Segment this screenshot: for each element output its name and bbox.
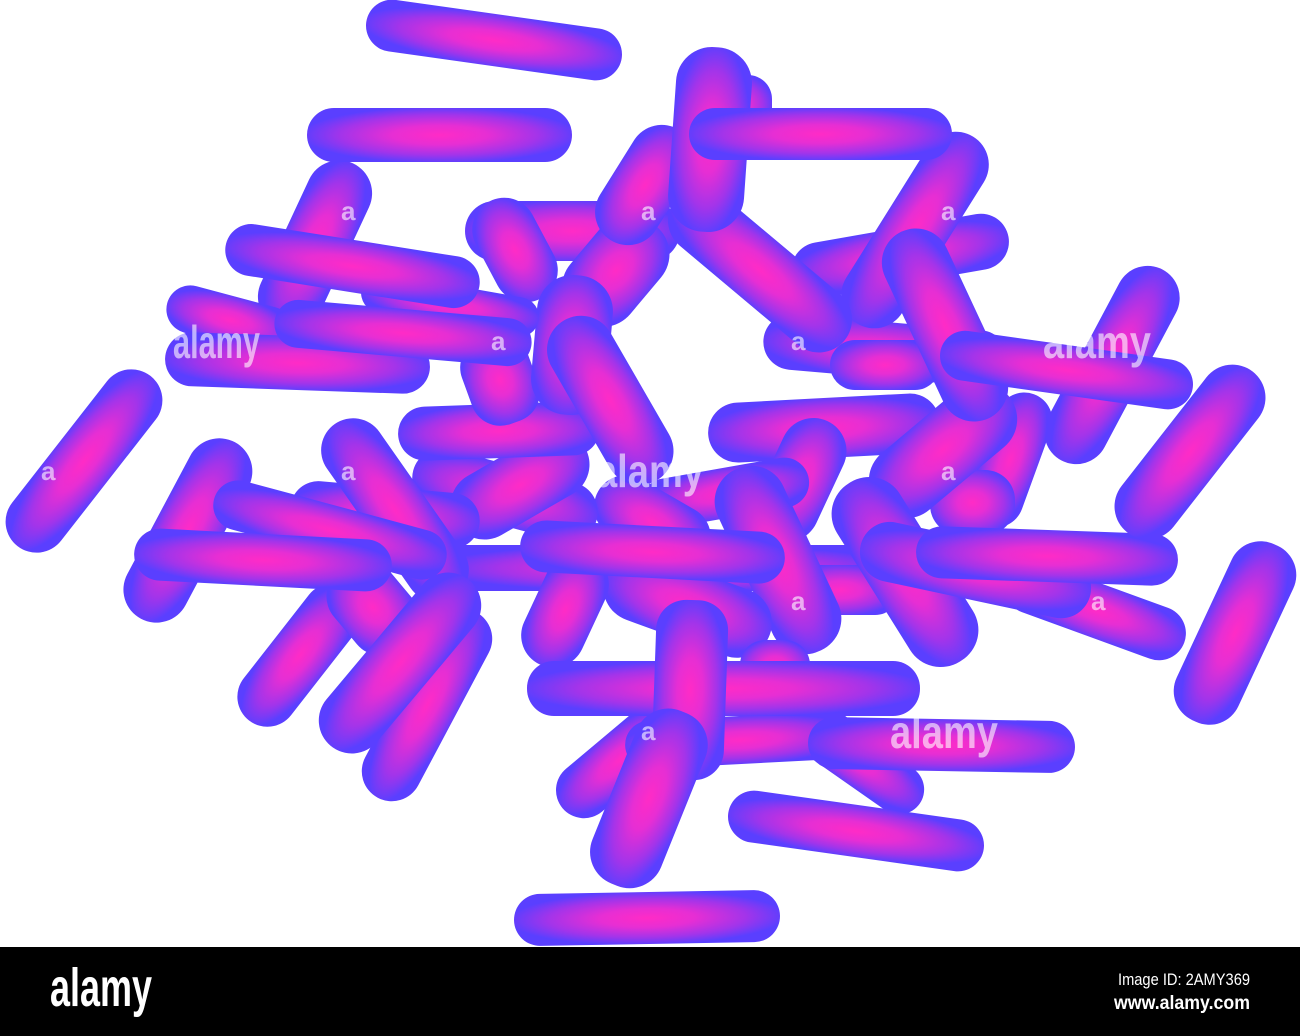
rod: centre steep <box>703 454 853 666</box>
rod: upper isolated <box>307 108 572 162</box>
rod: right steep <box>818 463 992 681</box>
rod: upper angled <box>583 112 707 258</box>
rod: lower horizontal back <box>624 710 856 770</box>
rod: left lower diagonal <box>208 475 452 585</box>
rod: left horizontal middle <box>397 401 601 462</box>
rod: right horizontal <box>937 328 1196 413</box>
rod: bottom left steep <box>305 559 495 767</box>
footer bar <box>0 947 1300 1036</box>
rod: centre right back <box>761 311 1010 389</box>
rod: centre back <box>582 463 723 581</box>
rod: left centre angled <box>438 418 602 552</box>
rod: upper centre short <box>461 186 569 314</box>
watermark: alamy left: alamy <box>173 316 260 368</box>
watermark: alamy right: alamy <box>1043 316 1151 368</box>
rod: left horizontal <box>133 527 393 593</box>
watermark: letter marks: a <box>791 326 806 356</box>
watermark: letter marks: a <box>1091 586 1106 616</box>
rod: centre lower short <box>511 542 619 678</box>
rod: bottom left steep back <box>351 598 503 812</box>
rod: lower left steep <box>225 571 375 739</box>
rod: right bottom isolated <box>1163 531 1300 735</box>
rod: lower left diagonal <box>545 690 695 830</box>
rod: middle long back <box>440 545 890 591</box>
watermark: letter marks: a <box>791 586 806 616</box>
rod: upper right steep <box>871 217 1019 433</box>
rod: left lower horizontal <box>164 331 431 395</box>
rod: lower right horizontal <box>808 717 1075 773</box>
rod: lower steep <box>580 698 718 898</box>
rod: back top right <box>700 75 772 135</box>
rod: centre diagonal <box>535 303 686 498</box>
rod: centre horizontal top <box>519 519 786 585</box>
watermark: letter marks: a <box>491 326 506 356</box>
rod: lower right isolated <box>725 787 987 875</box>
rod: steep back <box>960 385 1060 535</box>
rod: lower long horizontal <box>527 661 920 716</box>
footer logo: alamy: alamy <box>50 958 152 1018</box>
rod: back upper blob <box>547 200 684 342</box>
rod: left steep <box>112 427 264 634</box>
rod: lower left back <box>313 546 433 669</box>
rod: left upper steep <box>247 149 383 341</box>
rod: left far back <box>161 280 299 360</box>
rod: centre short <box>743 407 857 553</box>
rod: bottom isolated <box>514 890 780 946</box>
footer image id: Image ID: 2AMY369 <box>1118 970 1250 989</box>
rod: right upper diagonal <box>1033 255 1191 475</box>
watermark: alamy bottom: alamy <box>890 706 998 758</box>
watermark: letter marks: a <box>641 196 656 226</box>
rod: left back horizontal <box>288 479 482 551</box>
watermark: letter marks <box>41 196 1106 746</box>
watermark: letter marks: a <box>941 456 956 486</box>
rod: lower back bump <box>740 640 810 690</box>
watermark: letter marks: a <box>641 716 656 746</box>
rod: left middle horizontal <box>272 298 534 368</box>
rod: centre right horizontal <box>707 392 941 464</box>
watermark: letter marks: a <box>941 196 956 226</box>
rod: right lower filler <box>930 470 1015 535</box>
rod: left diagonal <box>309 406 481 614</box>
rod: top horizontal <box>689 108 952 160</box>
watermark: letter marks: a <box>341 456 356 486</box>
rod: upper right back <box>787 209 1013 303</box>
rod: back upper horizontal <box>465 201 680 261</box>
rod: centre tall <box>528 272 616 418</box>
rod: right lower <box>854 516 1097 624</box>
watermark overlay <box>41 196 1151 758</box>
rod: upper diagonal <box>829 119 1001 341</box>
rod: upper down-right <box>655 174 865 366</box>
rod: left upper horizontal <box>222 220 483 312</box>
rod: left upper back <box>358 270 542 340</box>
rod: far right isolated <box>1101 351 1279 553</box>
rod: top isolated <box>363 0 625 84</box>
watermark: alamy centre: alamy <box>596 445 704 497</box>
rod: back left mid <box>452 326 548 434</box>
rod: lower vertical <box>651 599 729 781</box>
watermark: letter marks: a <box>41 456 56 486</box>
rod: left centre back <box>405 441 605 549</box>
rod: lower right diagonal <box>766 686 934 824</box>
rod: centre lower back <box>593 542 782 668</box>
rod: centre right filler <box>830 340 940 390</box>
rod: right diagonal <box>854 367 1032 533</box>
rod: lower right back <box>780 565 900 615</box>
rod: centre horizontal back <box>637 454 813 532</box>
rod: right lower back <box>996 552 1194 668</box>
rod: right lower top <box>915 525 1179 587</box>
watermark: letter marks: a <box>341 196 356 226</box>
rod: far left isolated <box>0 357 175 565</box>
footer website: www.alamy.com <box>1113 993 1250 1014</box>
rod: upper vertical <box>666 45 754 234</box>
